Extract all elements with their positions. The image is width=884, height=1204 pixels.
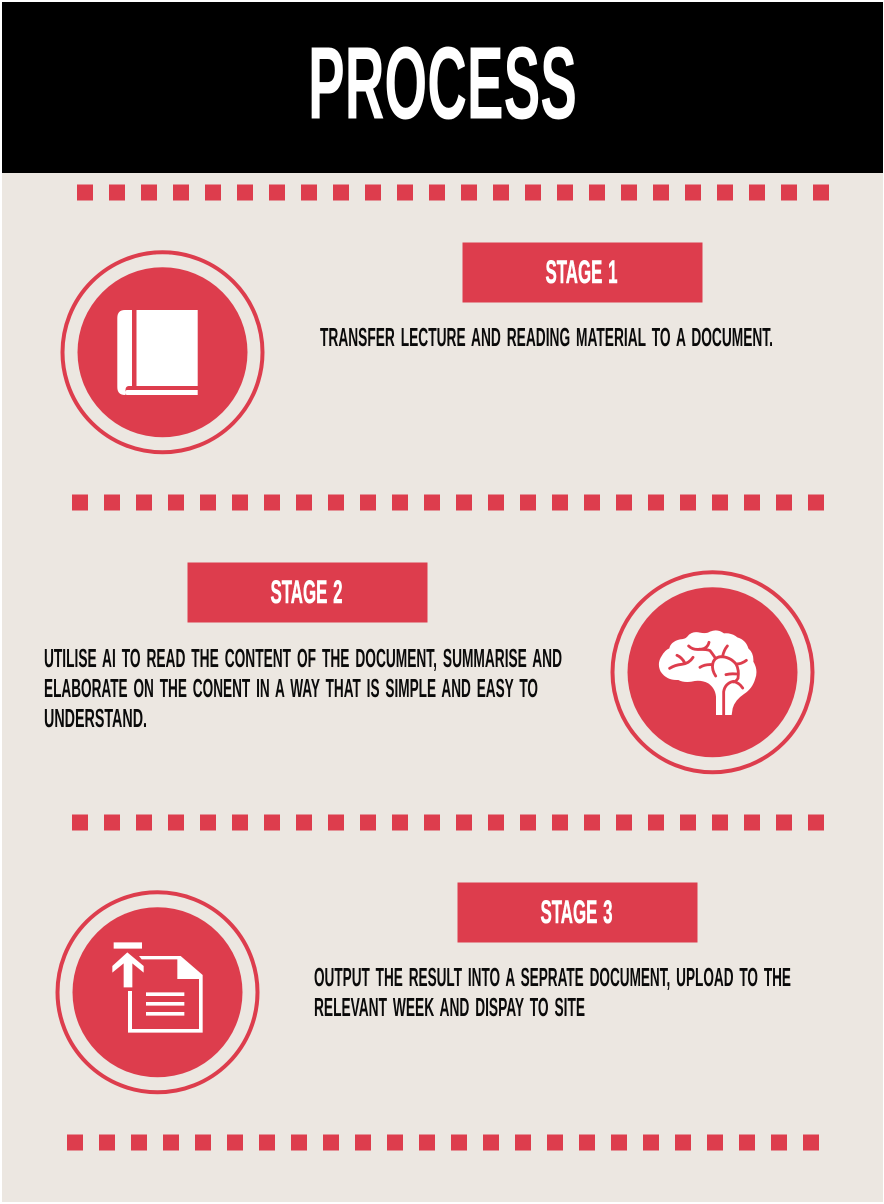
panel: stage 2	[44, 562, 812, 772]
title: PROCESS	[308, 26, 577, 140]
stage 1 label	[462, 242, 702, 302]
stage 2 label	[188, 562, 428, 622]
stage 1 label: STAGE 1	[546, 254, 618, 290]
panel: stage 1	[62, 242, 773, 452]
stage 3 text	[314, 962, 791, 1022]
stage 2 text: UNDERSTAND.	[44, 703, 147, 733]
divider: dotted row 4	[67, 1134, 819, 1150]
divider: dotted row 1	[77, 184, 829, 200]
divider: dotted row 2	[72, 494, 824, 510]
icon: book	[62, 252, 262, 452]
stage 3 label: STAGE 3	[540, 894, 612, 930]
stage 2 text	[44, 643, 562, 733]
stage 2 label: STAGE 2	[270, 574, 342, 610]
icon: brain	[612, 572, 812, 772]
panel: stage 3	[58, 882, 791, 1092]
divider: dotted row 3	[72, 814, 824, 830]
header band	[2, 2, 883, 173]
icon: document upload	[58, 892, 258, 1092]
stage 3 label	[458, 882, 698, 942]
stage 3 text: RELEVANT WEEK AND DISPAY TO SITE	[314, 992, 585, 1022]
